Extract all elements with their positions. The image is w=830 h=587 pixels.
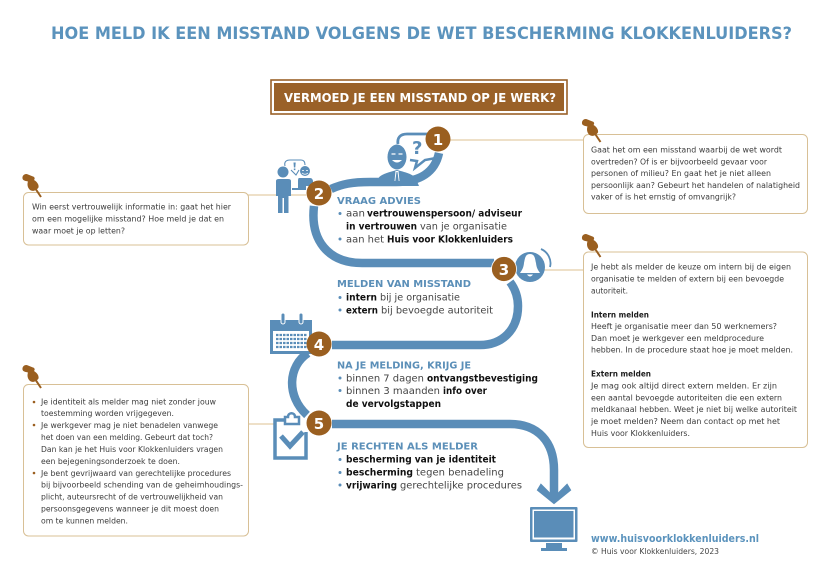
panel: right middle info: organisatie te melden of extern bij een bevoegde (591, 274, 784, 284)
panel: left bottom rights: Dan kan je het Huis voor Klokkenluiders vragen (41, 445, 223, 454)
text block: melden van misstand: intern (346, 292, 377, 304)
panel: left top info: om een mogelijke misstand? Hoe meld je dat en (32, 214, 224, 224)
website link text: www.huisvoorklokkenluiders.nl (591, 532, 759, 545)
text block: vraag advies: aan het (346, 234, 384, 246)
text block: melden van misstand (337, 279, 493, 316)
text block: je rechten als melder: JE RECHTEN ALS MELDER (336, 442, 478, 452)
text block: vraag advies: Huis voor Klokkenluiders (387, 234, 513, 246)
panel: right top info (584, 134, 808, 214)
panel: left bottom rights: toestemming worden vrijgegeven. (41, 409, 174, 418)
step 4 badge: 4 (314, 336, 324, 354)
panel: right middle info: Je hebt als melder de keuze om intern bij de eigen (590, 262, 791, 272)
panel: right middle info: Dan moet je werkgever een meldprocedure (591, 334, 764, 343)
text block: na je melding: binnen 3 maanden (346, 386, 440, 397)
icon: person with question: ? (412, 138, 422, 159)
text block: je rechten als melder (336, 442, 522, 492)
text block: melden van misstand: bij je organisatie (380, 292, 460, 304)
step 2 badge (306, 180, 332, 206)
text block: vraag advies: VRAAG ADVIES (337, 196, 421, 207)
panel: right middle info: autoriteit. (591, 286, 628, 296)
step 1 badge (426, 126, 450, 152)
panel: left bottom rights (24, 384, 248, 536)
step 1 badge: 1 (433, 131, 443, 149)
step 3 badge: 3 (499, 261, 509, 279)
banner: vermoed je een misstand (271, 80, 567, 114)
text block: na je melding (337, 360, 538, 410)
panel: left bottom rights: het doen van een melding. Gebeurt dat toch? (41, 433, 213, 442)
icon: clipboard with check (275, 413, 306, 458)
text block: je rechten als melder: bescherming van je identiteit (346, 454, 496, 466)
icon: pin right top (582, 119, 600, 142)
panel: left bottom rights: persoonsgegevens wanneer je dit moest doen (41, 504, 219, 514)
text block: melden van misstand: MELDEN VAN MISSTAND (337, 279, 471, 290)
connector lines (248, 140, 586, 424)
panel: left bottom rights: bij bijvoorbeeld schending van de geheimhoudings- (41, 480, 243, 490)
panel: right middle info: Je mag ook altijd direct extern melden. Er zijn (590, 382, 777, 390)
icon: pin right middle (582, 234, 600, 257)
panel: right middle info: Intern melden (591, 310, 649, 320)
panel: right middle info (584, 252, 808, 448)
text block: je rechten als melder: vrijwaring (346, 480, 397, 492)
text block: na je melding: binnen 7 dagen (346, 374, 424, 384)
step 4 badge (306, 332, 332, 356)
step 3 badge (492, 256, 516, 282)
icon: two people talking (276, 160, 313, 213)
text block: je rechten als melder: gerechtelijke procedures (400, 480, 522, 492)
icon: pin left top (22, 174, 41, 197)
step 5 badge: 5 (314, 415, 324, 433)
panel: right middle info: hebben. In de procedure staat hoe je moet melden. (591, 346, 793, 354)
panel: left top info: waar moet je op letten? (32, 226, 125, 236)
flow path (292, 153, 554, 498)
copyright: © Huis voor Klokkenluiders, 2023 (591, 547, 719, 556)
panel: left top info: Win eerst vertrouwelijk informatie in: gaat het hier (32, 202, 232, 212)
arrow head (538, 485, 570, 503)
text block: vraag advies: van je organisatie (420, 222, 507, 232)
step 2 badge: 2 (314, 185, 324, 203)
panel: right middle info: een aantal bevoegde autoriteiten die een extern (591, 394, 782, 402)
text block: melden van misstand: extern (346, 306, 378, 316)
icon: pin left bottom (22, 365, 41, 388)
panel: right top info: overtreden? Of is er bijvoorbeeld gevaar voor (591, 158, 768, 166)
text block: na je melding: de vervolgstappen (346, 399, 441, 410)
panel: left top info (24, 192, 248, 245)
title: HOE MELD IK EEN MISSTAND VOLGENS DE WET BESCHERMING KLOKKENLUIDERS? (51, 24, 792, 43)
panel: right middle info: Huis voor Klokkenluiders. (591, 429, 690, 438)
text block: na je melding: ontvangstbevestiging (427, 374, 538, 384)
panel: right middle info: je moet melden? Neem dan contact op met het (590, 417, 780, 426)
text block: vraag advies: in vertrouwen (346, 222, 417, 232)
panel: right middle info: meldkanaal hebben. Weet je niet bij welke autoriteit (591, 405, 797, 414)
banner: vermoed je een misstand: VERMOED JE EEN MISSTAND OP JE WERK? (284, 90, 556, 105)
text block: melden van misstand: bij bevoegde autoriteit (381, 306, 493, 316)
panel: right top info: personen of milieu? En gaat het je niet alleen (591, 169, 771, 178)
text block: vraag advies: vertrouwenspersoon/ adviseur (367, 208, 522, 220)
panel: right middle info: Extern melden (591, 370, 651, 378)
panel: left bottom rights: om te kunnen melden. (41, 516, 128, 526)
text block: na je melding: NA JE MELDING, KRIJG JE (337, 360, 471, 372)
text block: na je melding: info over (443, 386, 487, 397)
step 5 badge (306, 410, 332, 436)
panel: left bottom rights: Je werkgever mag je niet benadelen vanwege (40, 421, 218, 430)
icon: calendar (270, 313, 312, 354)
panel: right top info: Gaat het om een misstand waarbij de wet wordt (591, 146, 782, 154)
panel: right middle info: Heeft je organisatie meer dan 50 werknemers? (591, 322, 777, 331)
icon: monitor (530, 507, 578, 551)
text block: vraag advies: aan (346, 208, 365, 220)
panel: left bottom rights: Je bent gevrijwaard van gerechtelijke procedures (40, 469, 231, 478)
text block: vraag advies (337, 196, 522, 246)
panel: left bottom rights: een bejegeningsonderzoek te doen. (41, 457, 180, 466)
text block: je rechten als melder: bescherming (346, 468, 413, 478)
panel: left bottom rights: plicht, auteursrecht of de vertrouwelijkheid van (41, 492, 223, 502)
icon: bell (515, 249, 551, 282)
text block: je rechten als melder: tegen benadeling (416, 468, 504, 478)
icon: person with question (378, 134, 436, 186)
panel: right top info: vaker of is het ernstig of omvangrijk? (591, 192, 736, 202)
panel: right top info: persoonlijk aan? Gebeurt het handelen of nalatigheid (591, 181, 800, 190)
panel: left bottom rights: Je identiteit als melder mag niet zonder jouw (40, 398, 216, 406)
